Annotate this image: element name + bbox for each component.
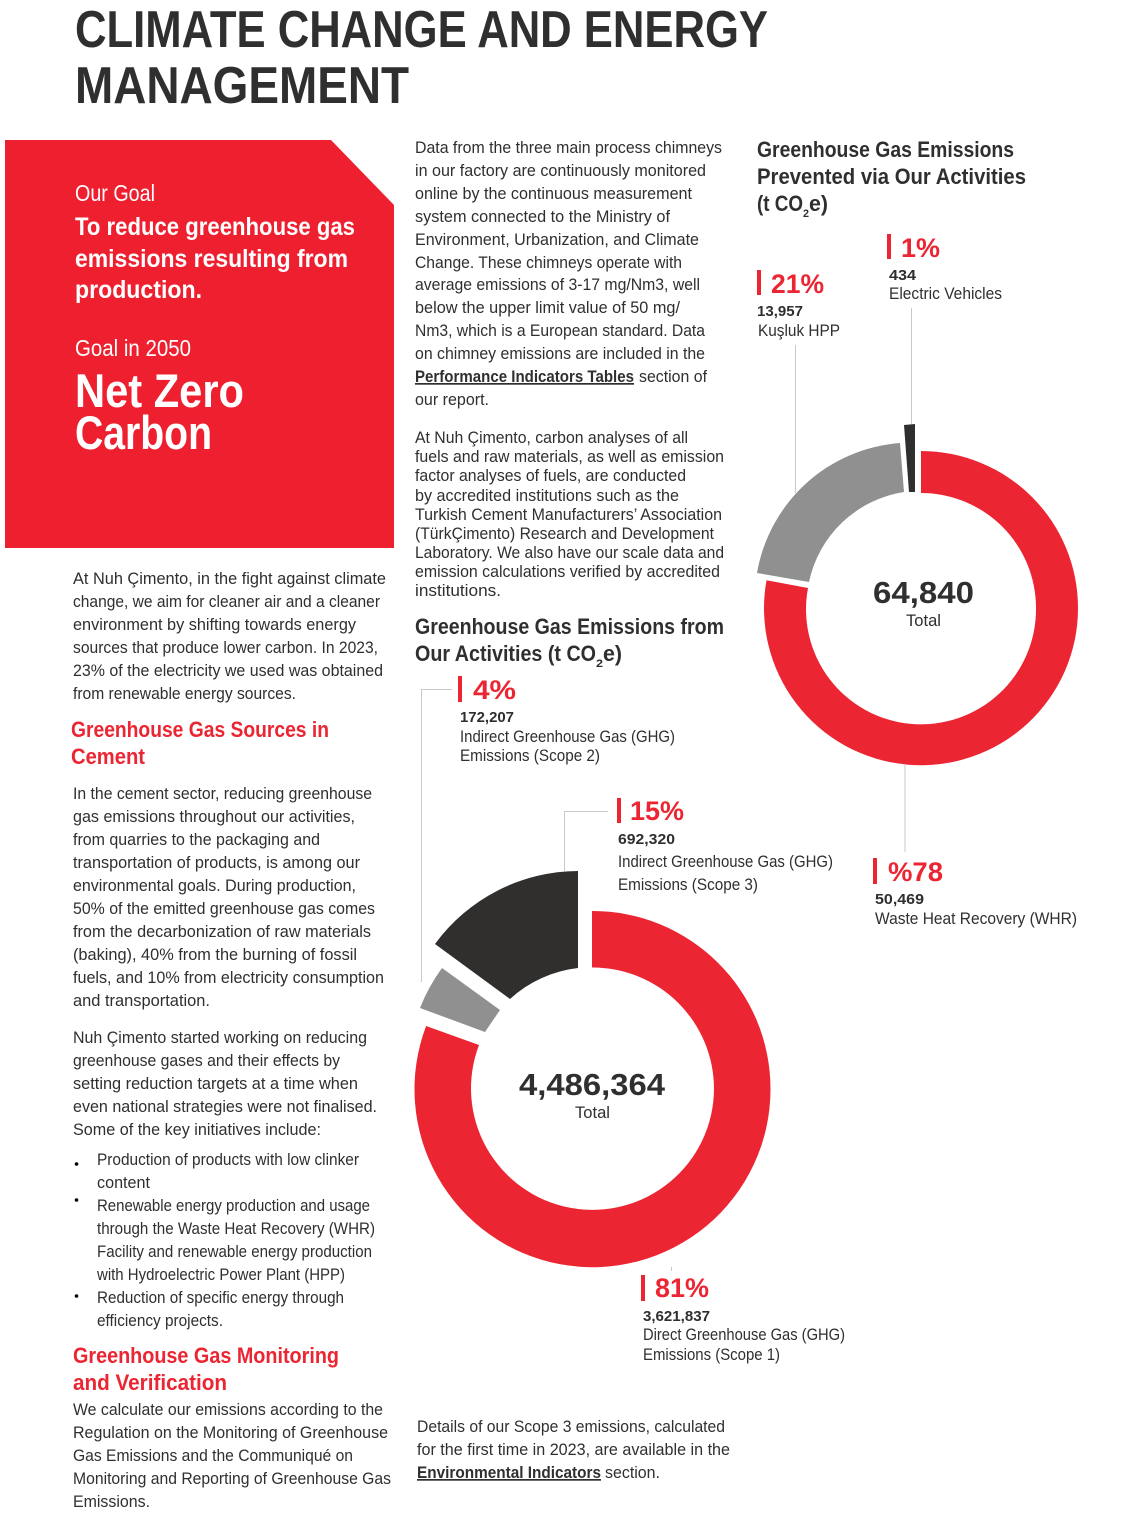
text: chimneys paragraph: system connected to the Ministry of <box>415 207 670 226</box>
callout: scope 2 4%: Emissions (Scope 2) <box>460 746 600 765</box>
text: scope 3 note: for the first time in 2023, are available in the <box>417 1440 730 1459</box>
callout: scope 1 81%: Emissions (Scope 1) <box>643 1345 780 1364</box>
segment: electric vehicles 1% <box>904 424 915 492</box>
heading: emissions from activities <box>415 614 724 670</box>
text: goal in 2050: Goal in 2050 <box>75 335 191 361</box>
callout: scope 1 81%: Direct Greenhouse Gas (GHG) <box>643 1325 845 1344</box>
text: chimneys paragraph: our report. <box>415 390 489 409</box>
text: carbon analyses paragraph: (TürkÇimento) Research and Development <box>415 524 714 543</box>
text: carbon analyses paragraph: At Nuh Çimento, carbon analyses of all <box>415 428 688 447</box>
center total <box>519 1067 666 1122</box>
text: chimneys paragraph: Nm3, which is a European standard. Data <box>415 321 705 340</box>
center total <box>873 575 974 630</box>
text: chimneys paragraph: on chimney emissions are included in the <box>415 344 705 363</box>
heading: emissions prevented <box>757 137 1026 220</box>
list: key initiatives: through the Waste Heat Recovery (WHR) <box>97 1219 375 1238</box>
callout: electric vehicles 1%: 434 <box>889 267 917 284</box>
callout: Kuşluk HPP 21%: 13,957 <box>757 303 803 320</box>
text: cement sector paragraph: In the cement sector, reducing greenhouse <box>73 784 372 803</box>
callout: electric vehicles 1%: Electric Vehicles <box>889 284 1002 303</box>
list: key initiatives: Facility and renewable energy production <box>97 1242 372 1261</box>
callout: scope 3 15%: Emissions (Scope 3) <box>618 875 758 894</box>
center total: 4,486,364 <box>519 1067 666 1102</box>
text: goal in 2050: Carbon <box>75 406 212 459</box>
callout: Kuşluk HPP 21%: 21% <box>771 269 824 299</box>
text: our goal: To reduce greenhouse gas <box>75 213 355 241</box>
panel: goal <box>5 140 394 548</box>
segment: scope 2 4% <box>420 968 500 1032</box>
center total: 64,840 <box>873 575 974 610</box>
callout: scope 1 81%: 81% <box>655 1273 709 1303</box>
heading: emissions from activities: 2 <box>596 658 603 670</box>
text: intro paragraph: from renewable energy sources. <box>73 684 296 703</box>
text: intro paragraph: environment by shifting towards energy <box>73 615 356 634</box>
heading: emissions prevented: (t CO <box>757 191 803 216</box>
heading: sources in cement: Cement <box>71 744 146 769</box>
callout: scope 3 15% <box>564 796 833 894</box>
list: key initiatives: Renewable energy production and usage <box>97 1196 370 1215</box>
segment: scope 1 81% <box>415 911 771 1267</box>
text: carbon analyses paragraph: fuels and raw materials, as well as emission <box>415 447 724 466</box>
text: our goal: production. <box>75 276 202 304</box>
callout: electric vehicles 1% <box>887 233 1002 424</box>
text: cement sector paragraph: from quarries to the packaging and <box>73 830 320 849</box>
donut chart: emissions from activities <box>415 871 771 1267</box>
text: intro paragraph: At Nuh Çimento, in the fight against climate <box>73 569 386 588</box>
text: carbon analyses paragraph: Turkish Cement Manufacturers’ Association <box>415 505 722 524</box>
list: key initiatives: with Hydroelectric Power Plant (HPP) <box>96 1265 345 1284</box>
text: chimneys paragraph: Data from the three main process chimneys <box>415 138 722 157</box>
text: cement sector paragraph: transportation of products, is among our <box>73 853 360 872</box>
segment: WHR 78% <box>764 451 1078 765</box>
text: chimneys paragraph: section of <box>639 367 707 386</box>
callout: scope 3 15%: 692,320 <box>618 831 675 848</box>
text: scope 3 note: Details of our Scope 3 emissions, calculated <box>417 1417 725 1436</box>
text: intro paragraph <box>73 569 386 703</box>
heading: monitoring and verification: Greenhouse Gas Monitoring <box>73 1343 339 1368</box>
callout: WHR 78%: %78 <box>888 857 943 887</box>
text: monitoring paragraph: Monitoring and Reporting of Greenhouse Gas <box>73 1469 391 1488</box>
text: intro paragraph: 23% of the electricity we used was obtained <box>73 661 383 680</box>
text: goal in 2050 <box>75 335 244 459</box>
heading: emissions from activities: e) <box>603 641 622 666</box>
heading: monitoring and verification: and Verification <box>73 1370 227 1395</box>
text: cement sector paragraph <box>73 784 384 1010</box>
text: cement sector paragraph: (baking), 40% from the burning of fossil <box>73 945 357 964</box>
heading: emissions from activities: Greenhouse Gas Emissions from <box>415 614 724 639</box>
text: monitoring paragraph: Regulation on the Monitoring of Greenhouse <box>73 1423 388 1442</box>
center total: Total <box>906 611 941 630</box>
text: cement sector paragraph: from the decarbonization of raw materials <box>73 922 371 941</box>
text: our goal: emissions resulting from <box>75 245 348 273</box>
callout: Kuşluk HPP 21% <box>757 269 840 493</box>
text: our goal <box>75 180 355 304</box>
text: carbon analyses paragraph: factor analyses of fuels, are conducted <box>415 466 686 485</box>
callout: scope 2 4%: Indirect Greenhouse Gas (GHG) <box>460 727 675 746</box>
title: MANAGEMENT <box>75 57 409 115</box>
callout: scope 2 4% <box>422 675 675 982</box>
list: key initiatives: efficiency projects. <box>97 1311 223 1330</box>
callout: electric vehicles 1%: 1% <box>901 233 940 263</box>
heading: emissions prevented: Prevented via Our Activities <box>757 164 1026 189</box>
text: monitoring paragraph: Emissions. <box>73 1492 150 1511</box>
text: chimneys paragraph: Environment, Urbanization, and Climate <box>415 230 699 249</box>
heading: emissions prevented: Greenhouse Gas Emissions <box>757 137 1014 162</box>
text: monitoring paragraph: We calculate our emissions according to the <box>73 1400 383 1419</box>
list: key initiatives: Production of products with low clinker <box>97 1150 359 1169</box>
text: goal in 2050: Net Zero <box>75 364 244 417</box>
text: carbon analyses paragraph: institutions. <box>415 581 501 600</box>
callout: WHR 78%: 50,469 <box>875 891 924 908</box>
text: monitoring paragraph <box>73 1400 391 1511</box>
text: chimneys paragraph: below the upper limit value of 50 mg/ <box>415 298 680 317</box>
heading: emissions from activities: Our Activities (t CO <box>415 641 596 666</box>
text: initiatives intro paragraph <box>73 1028 377 1139</box>
callout: WHR 78% <box>873 765 1077 928</box>
heading: sources in cement <box>71 717 329 769</box>
text: intro paragraph: sources that produce lower carbon. In 2023, <box>73 638 378 657</box>
heading: sources in cement: Greenhouse Gas Sources in <box>71 717 329 742</box>
text: scope 3 note: Environmental Indicators <box>417 1463 601 1482</box>
heading: emissions prevented: e) <box>809 191 828 216</box>
callout: scope 2 4%: 4% <box>473 675 516 705</box>
text: cement sector paragraph: 50% of the emitted greenhouse gas comes <box>73 899 375 918</box>
text: chimneys paragraph: in our factory are continuously monitored <box>415 161 706 180</box>
heading: monitoring and verification <box>73 1343 339 1395</box>
text: our goal: Our Goal <box>75 180 155 206</box>
text: monitoring paragraph: Gas Emissions and the Communiqué on <box>73 1446 353 1465</box>
text: cement sector paragraph: environmental goals. During production, <box>73 876 356 895</box>
text: chimneys paragraph: online by the continuous measurement <box>415 184 692 203</box>
text: intro paragraph: change, we aim for cleaner air and a cleaner <box>73 592 380 611</box>
list: key initiatives: content <box>97 1173 150 1192</box>
text: scope 3 note: section. <box>605 1463 660 1482</box>
callout: scope 2 4%: 172,207 <box>460 709 514 726</box>
text: initiatives intro paragraph: Nuh Çimento started working on reducing <box>73 1028 367 1047</box>
callout: scope 1 81%: 3,621,837 <box>643 1308 710 1325</box>
text: chimneys paragraph <box>415 138 722 409</box>
text: carbon analyses paragraph: Laboratory. We also have our scale data and <box>415 543 724 562</box>
text: chimneys paragraph: Performance Indicators Tables <box>415 367 634 386</box>
center total: Total <box>575 1103 610 1122</box>
text: scope 3 note <box>417 1417 730 1482</box>
title <box>75 1 768 115</box>
segment: Kuşluk HPP 21% <box>757 443 904 582</box>
callout: scope 3 15%: Indirect Greenhouse Gas (GHG) <box>618 852 833 871</box>
list: key initiatives: Reduction of specific energy through <box>97 1288 344 1307</box>
text: carbon analyses paragraph: by accredited institutions such as the <box>415 486 679 505</box>
text: carbon analyses paragraph <box>415 428 724 600</box>
donut chart: emissions prevented <box>757 424 1078 765</box>
text: initiatives intro paragraph: greenhouse gases and their effects by <box>73 1051 340 1070</box>
text: chimneys paragraph: Change. These chimneys operate with <box>415 253 682 272</box>
callout: scope 3 15%: 15% <box>630 796 684 826</box>
callout: Kuşluk HPP 21%: Kuşluk HPP <box>758 321 840 340</box>
title: CLIMATE CHANGE AND ENERGY <box>75 1 768 59</box>
segment: scope 3 15% <box>435 871 578 999</box>
list: key initiatives <box>75 1150 375 1330</box>
text: cement sector paragraph: fuels, and 10% from electricity consumption <box>73 968 384 987</box>
callout: scope 1 81% <box>641 1267 845 1364</box>
text: cement sector paragraph: and transportation. <box>73 991 210 1010</box>
heading: emissions prevented: 2 <box>803 208 809 220</box>
text: initiatives intro paragraph: setting reduction targets at a time when <box>73 1074 358 1093</box>
text: cement sector paragraph: gas emissions throughout our activities, <box>73 807 355 826</box>
text: initiatives intro paragraph: even national strategies were not finalised. <box>73 1097 377 1116</box>
callout: WHR 78%: Waste Heat Recovery (WHR) <box>875 909 1077 928</box>
text: initiatives intro paragraph: Some of the key initiatives include: <box>73 1120 321 1139</box>
text: chimneys paragraph: average emissions of 3-17 mg/Nm3, well <box>415 275 700 294</box>
text: carbon analyses paragraph: emission calculations verified by accredited <box>415 562 720 581</box>
